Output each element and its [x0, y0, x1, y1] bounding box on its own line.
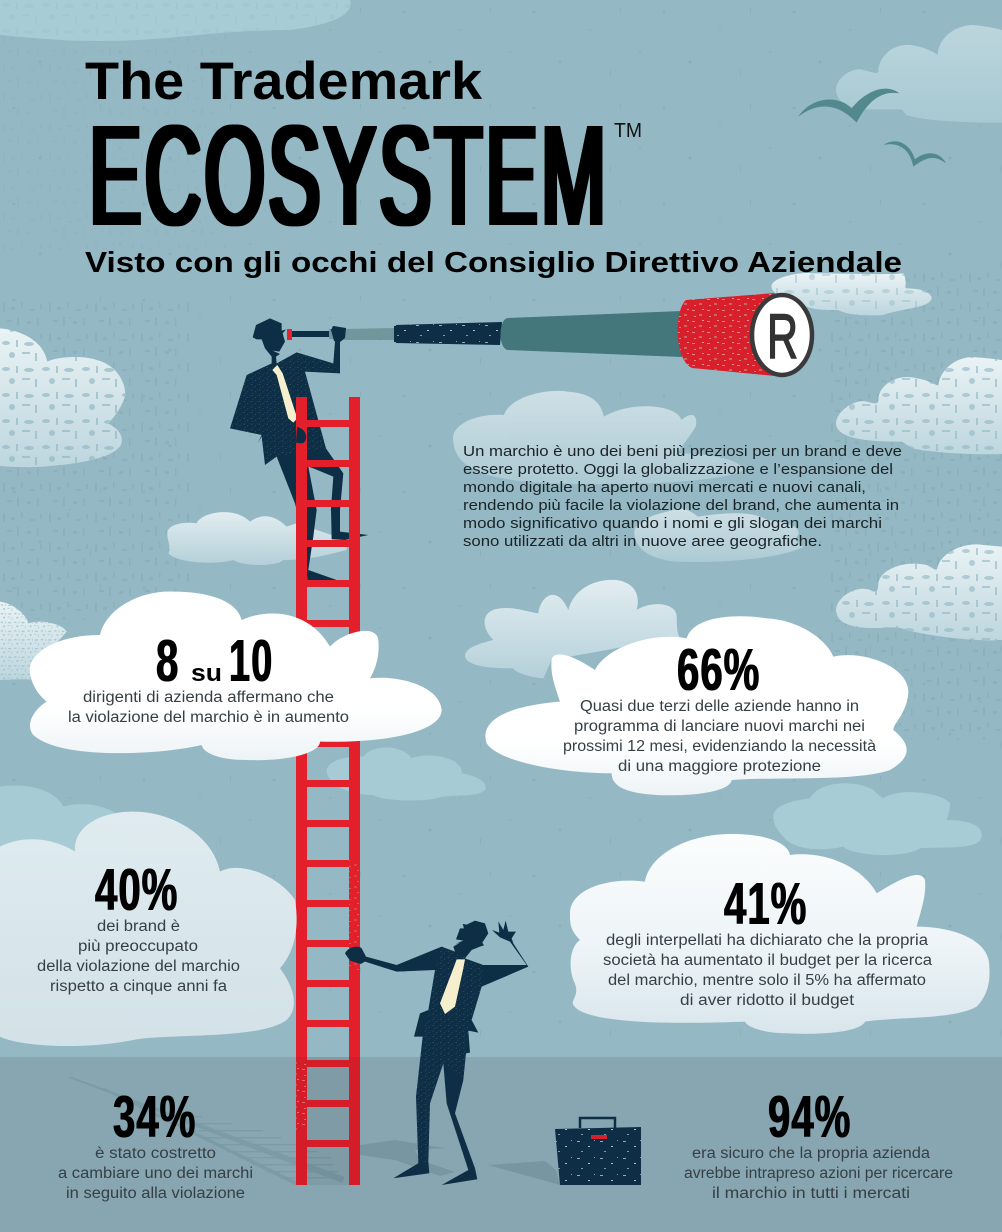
stat: 8 su 10: dirigenti di azienda affermano che	[83, 689, 334, 706]
stat: 34%: è stato costretto	[95, 1145, 216, 1162]
body silhouette	[230, 318, 368, 580]
stat: 66%: programma di lanciare nuovi marchi nei	[574, 718, 865, 735]
grey section	[329, 328, 394, 340]
title: The Trademark: The Trademark	[85, 52, 483, 111]
cloud: top left	[0, 0, 351, 41]
registered symbol	[752, 295, 812, 375]
stat: 94%: il marchio in tutti i mercati	[712, 1185, 910, 1202]
cloud: intro background	[453, 391, 804, 562]
ladder	[296, 397, 360, 1185]
stat: 66%	[563, 636, 876, 775]
stat: 40%: della violazione del marchio	[37, 958, 240, 975]
figure: businessman on ground	[345, 921, 528, 1185]
stat: 66%: Quasi due terzi delle aziende hanno in	[580, 698, 859, 715]
stat: 66%: di una maggiore protezione	[618, 758, 821, 775]
cloud: behind telescope	[772, 273, 932, 315]
intro text: rendendo più facile la violazione del brand, che aumenta in	[463, 498, 899, 514]
hand on telescope	[331, 326, 346, 342]
cloud texture: right clouds	[772, 273, 1002, 641]
stat: 34%: in seguito alla violazione	[66, 1185, 245, 1202]
red section	[678, 293, 775, 376]
intro text: mondo digitale ha aperto nuovi mercati e nuovi canali,	[463, 480, 866, 496]
stat: 40%: rispetto a cinque anni fa	[50, 978, 227, 995]
cloud: right lower	[836, 544, 1002, 640]
intro text: essere protetto. Oggi la globalizzazione e l’espansione del	[463, 462, 893, 478]
telescope: R	[767, 302, 798, 372]
cloud texture: left cloud	[0, 328, 125, 467]
stat: 41%: degli interpellati ha dichiarato che la propria	[606, 932, 928, 949]
telescope	[287, 293, 812, 376]
eyepiece	[287, 329, 292, 340]
cloud: 66%	[485, 616, 908, 795]
cloud: 41%	[570, 834, 990, 1034]
ladder shadow	[67, 1077, 345, 1185]
cloud: right upper	[836, 357, 1002, 454]
stat: 94%: 94%	[768, 1083, 851, 1150]
body speckle	[230, 352, 340, 465]
stat: 34%: a cambiare uno dei marchi	[58, 1165, 253, 1182]
cloud: top right	[836, 25, 1002, 123]
cloud: small right middle	[773, 783, 982, 855]
cloud: 40%	[0, 812, 297, 1046]
title: ECOSYSTEM: ECOSYSTEM	[90, 98, 610, 255]
cloud: left of big white cloud	[0, 602, 67, 680]
stat: 41%: del marchio, mentre solo il 5% ha affermato	[608, 972, 926, 989]
subtitle: Visto con gli occhi del Consiglio Direttivo Aziendale	[85, 247, 902, 279]
cloud: left small under man	[167, 512, 347, 565]
stat: 8 su 10: su	[191, 660, 222, 687]
intro text: modo significativo quando i nomi e gli slogan dei marchi	[463, 516, 882, 532]
stat: 40%: più preoccupato	[78, 938, 198, 955]
body speckle	[416, 947, 483, 1163]
stat: 34%: 34%	[113, 1083, 196, 1150]
dark section	[394, 322, 502, 345]
intro text: Un marchio è uno dei beni più preziosi per un brand e deve	[463, 444, 902, 460]
tie	[440, 959, 465, 1014]
cloud: behind 66%	[465, 580, 680, 678]
stat: 66%: 66%	[677, 636, 760, 703]
intro text	[463, 444, 902, 550]
ground band	[0, 1057, 1002, 1232]
stat: 66%: prossimi 12 mesi, evidenziando la necessità	[563, 738, 876, 755]
stat: 41%: società ha aumentato il budget per la ricerca	[603, 952, 932, 969]
stat: 40%: dei brand è	[97, 918, 180, 935]
body silhouette	[345, 921, 528, 1185]
stat: 41%	[603, 870, 932, 1009]
cloud: left textured	[0, 328, 125, 467]
trademark symbol: TM	[614, 120, 642, 142]
stat: 40%	[37, 856, 240, 995]
icon: birds	[798, 89, 946, 167]
figure: businessman with telescope	[230, 318, 368, 580]
tie	[272, 365, 297, 423]
intro text: sono utilizzati da altri in nuove aree geografiche.	[463, 534, 822, 550]
cloud: 8 su 10	[30, 592, 442, 760]
stat: 8 su 10: la violazione del marchio è in aumento	[68, 709, 349, 726]
man and briefcase shadows	[360, 1140, 560, 1185]
stat: 34%	[58, 1083, 253, 1202]
stat: 8 su 10	[68, 627, 349, 726]
stat: 94%: avrebbe intrapreso azioni per ricercare	[684, 1165, 953, 1182]
stat: 41%: 41%	[724, 870, 807, 937]
stat: 8 su 10: 10	[229, 629, 274, 694]
stat: 94%: era sicuro che la propria azienda	[692, 1145, 930, 1162]
cloud: small behind ladder	[327, 747, 486, 800]
stat: 8 su 10: 8	[156, 627, 179, 694]
icon: briefcase	[555, 1118, 641, 1185]
stat: 41%: di aver ridotto il budget	[680, 992, 855, 1009]
cloud: behind 40%	[0, 786, 167, 880]
stat: 94%	[684, 1083, 953, 1202]
stat: 40%: 40%	[95, 856, 178, 923]
title block	[85, 52, 902, 279]
hand on ladder (top figure)	[296, 427, 306, 443]
teal section	[500, 311, 682, 357]
